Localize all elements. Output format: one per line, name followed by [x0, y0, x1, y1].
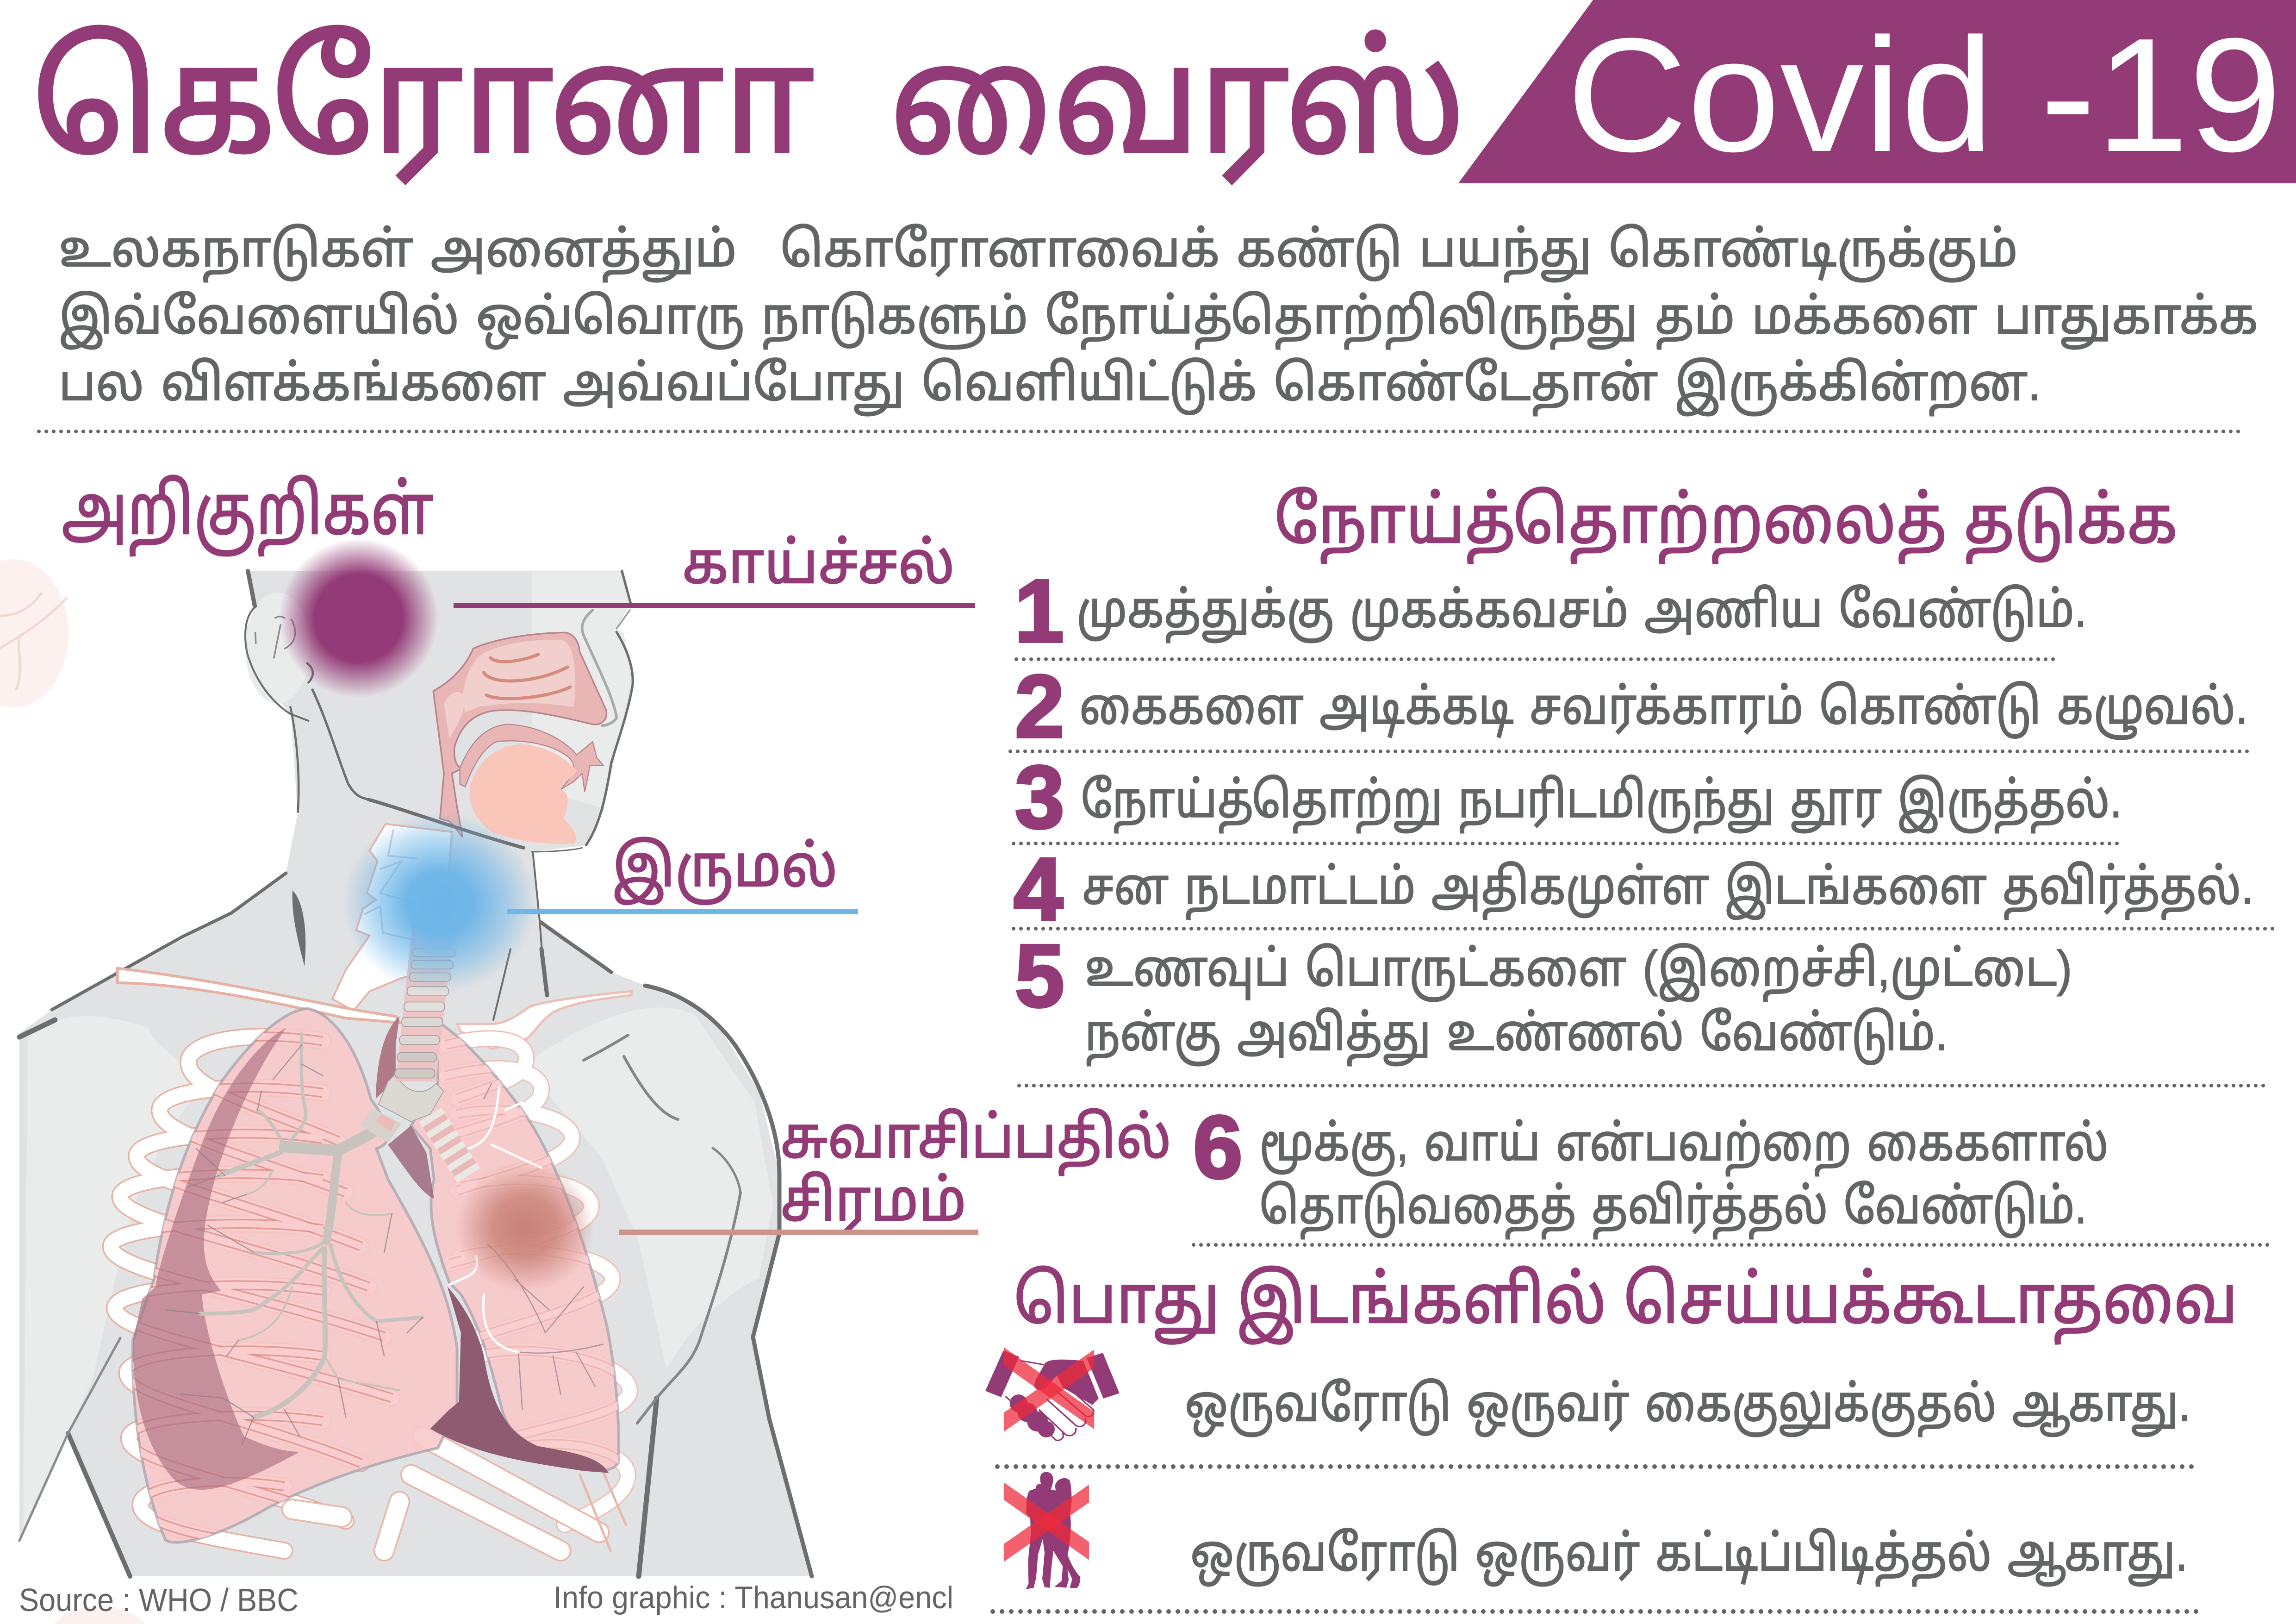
intro paragraph: பல விளக்கங்களை அவ்வப்போது வெளியிட்டுக் கொண்டேதான் இருக்கின்றன. [59, 355, 2041, 416]
infographic credit: Info graphic : Thanusan@encl [554, 1580, 953, 1615]
bronchial tree [166, 1033, 603, 1444]
lighter torso and arm patches [23, 572, 773, 1528]
decorative virus left [0, 559, 68, 707]
neck vertebrae [332, 824, 452, 1011]
item 1 [1014, 561, 2087, 661]
symptoms heading: அறிகுறிகள் [62, 471, 434, 556]
rib cage and lungs [111, 918, 632, 1551]
anatomy of head and neck [245, 571, 633, 1011]
left lung dark back [133, 1028, 300, 1490]
left lung [133, 1008, 457, 1543]
neck muscle mark [292, 890, 305, 966]
label: fever [454, 531, 975, 608]
right main bronchus [430, 1115, 468, 1175]
label: cough: இருமல் [612, 834, 838, 905]
item 4: 4 [1014, 839, 1063, 939]
item 5: உணவுப் பொருட்களை (இறைச்சி,முட்டை) [1085, 940, 2072, 1002]
body silhouette [19, 571, 812, 1576]
icon: no handshake [985, 1347, 1120, 1440]
fever marker [279, 538, 438, 698]
prevention list [1010, 561, 2274, 1245]
illustration: human torso with lungs [19, 538, 812, 1576]
palate [460, 724, 604, 792]
title: Tamil coronavirus: வைரஸ் [890, 18, 1466, 184]
right lung [411, 1022, 619, 1470]
item 6 [1193, 1097, 2109, 1239]
decorative virus bottom [51, 1606, 148, 1624]
label: fever: காய்ச்சல் [682, 531, 955, 595]
item 2 [1015, 656, 2248, 756]
intro paragraph: உலகநாடுகள் அனைத்தும் [59, 221, 737, 282]
dark notch under bronchus [388, 1125, 434, 1199]
shoulder and arm strokes [19, 873, 812, 1576]
label: shortness of breath [619, 1106, 1171, 1235]
banner: Covid-19: Covid -19 [1567, 5, 2282, 186]
item 5: 5 [1015, 926, 1064, 1025]
label: shortness of breath: சுவாசிப்பதில் [780, 1106, 1171, 1176]
cough marker [342, 812, 537, 993]
label: cough [507, 834, 858, 914]
ribs [111, 1037, 630, 1551]
item 3: 3 [1015, 747, 1064, 847]
prevention heading: நோய்த்தொற்றலைத் தடுக்க [1274, 483, 2178, 563]
item 6: தொடுவதைத் தவிர்த்தல் வேண்டும். [1259, 1178, 2087, 1239]
intro paragraph [59, 221, 2258, 416]
title: Tamil coronavirus: கெரோனா [31, 18, 815, 184]
tongue [470, 744, 577, 844]
lung apex left of trachea [376, 1016, 399, 1099]
carina and left main bronchus [361, 1074, 444, 1143]
right collarbone [457, 991, 632, 1049]
upper trachea inside neck [419, 931, 463, 954]
item 2: 2 [1015, 656, 1064, 756]
item 1: 1 [1014, 561, 1064, 661]
breathing difficulty marker [456, 1161, 595, 1293]
nasal cavity and pharynx [433, 632, 606, 837]
item 5 [1015, 926, 2072, 1066]
item 1: முகத்துக்கு முகக்கவசம் அணிய வேண்டும். [1076, 581, 2087, 643]
item 3 [1015, 747, 2122, 847]
ribs seen through lungs [111, 1037, 630, 1551]
text: no hugging: ஒருவரோடு ஒருவர் கட்டிப்பிடித்தல் ஆகாது. [1190, 1525, 2188, 1587]
title: Tamil coronavirus [31, 18, 1466, 184]
label: shortness of breath: சிரமம் [780, 1168, 966, 1233]
icon: no hugging [1004, 1472, 1089, 1589]
item 6: மூக்கு, வாய் என்பவற்றை கைகளால் [1259, 1115, 2109, 1176]
intro paragraph: கொரோனாவைக் கண்டு பயந்து கொண்டிருக்கும் [780, 221, 2018, 282]
left collarbone [118, 968, 399, 1023]
item 5: நன்கு அவித்து உண்ணல் வேண்டும். [1085, 1005, 1948, 1066]
trachea rings [395, 918, 455, 1081]
source credit: Source : WHO / BBC [19, 1582, 299, 1618]
dark lower mediastinum [430, 1287, 609, 1473]
item 4 [1014, 839, 2253, 939]
item 6: 6 [1193, 1097, 1243, 1197]
face and neck outlines [245, 571, 633, 972]
item 3: நோய்த்தொற்று நபரிடமிருந்து தூர இருத்தல். [1081, 772, 2122, 833]
